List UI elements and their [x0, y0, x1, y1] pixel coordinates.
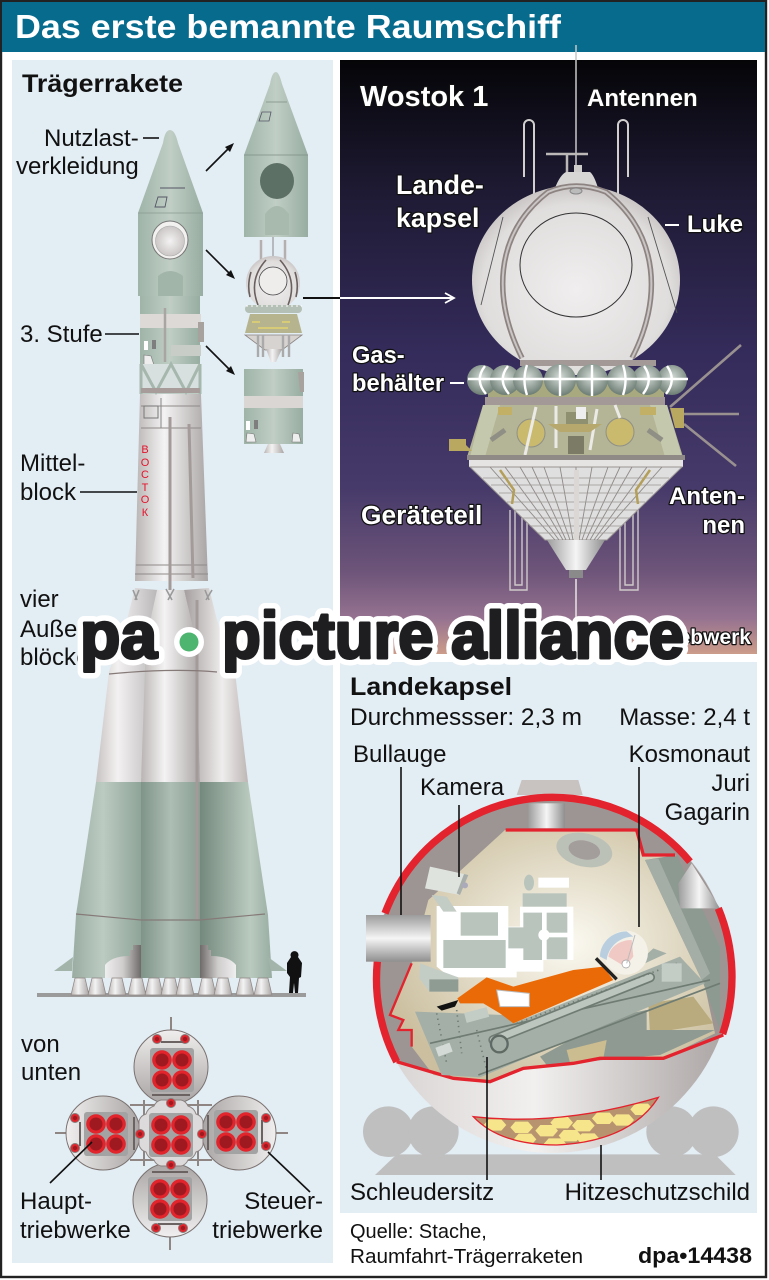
- labels: landing capsule: Kamera: [420, 774, 505, 801]
- labels: Wostok: behälter: [352, 371, 444, 397]
- dome: [555, 172, 598, 188]
- agency code: dpa•14438: [638, 1243, 752, 1268]
- gas bottles: [467, 364, 688, 398]
- straps: [503, 186, 651, 358]
- arrows: [206, 143, 454, 375]
- label: Vostok lettering: Т: [142, 482, 149, 494]
- labels: landing capsule: [350, 741, 750, 1206]
- third stage: [140, 296, 200, 364]
- labels: from below: [20, 1031, 323, 1244]
- heading: Wostok 1: Wostok 1: [360, 81, 488, 113]
- supports: [363, 1106, 739, 1175]
- hatch on ceiling: [553, 828, 616, 872]
- ejection seat: [415, 957, 720, 1077]
- panel: Wostok 1: [340, 60, 757, 654]
- cosmonaut: [437, 931, 667, 1023]
- exploded view: fairing: [244, 72, 308, 237]
- right antennas: [670, 345, 741, 466]
- labels: from below: unten: [21, 1059, 81, 1086]
- title: Das erste bemannte Raumschiff: [15, 9, 562, 46]
- heading: Landekapsel: Landekapsel: [350, 673, 512, 701]
- labels: landing capsule: Juri: [711, 770, 750, 797]
- labels: Wostok: Antennen: [587, 85, 698, 112]
- exploded view: third stage: [244, 369, 304, 453]
- sphere: [472, 185, 680, 375]
- left booster: [96, 588, 158, 782]
- lattice: [141, 364, 200, 394]
- label: Vostok lettering: О: [141, 494, 150, 506]
- rods: [170, 417, 197, 920]
- lower strut: [648, 997, 713, 1033]
- labels: left rocket: block: [20, 479, 77, 506]
- labels: Wostok: Anten-: [669, 483, 745, 510]
- labels: Wostok: Geräteteil: [361, 500, 482, 530]
- side antennas: [510, 510, 638, 590]
- instrument section: [467, 405, 683, 457]
- header band: [2, 2, 765, 52]
- labels: landing capsule: Bullauge: [353, 741, 446, 768]
- diagram: rocket from below: [55, 1017, 288, 1250]
- source note: Quelle: Stache,: [350, 1221, 487, 1243]
- equipment cone: [470, 467, 682, 540]
- labels: left rocket: Mittel-: [20, 450, 85, 477]
- icon: person for scale: [287, 951, 302, 993]
- hatch tube: [528, 803, 565, 828]
- panel: Trägerrakete: [12, 60, 333, 1263]
- labels: Wostok: Gas-: [352, 343, 405, 369]
- label: Vostok lettering: К: [142, 507, 149, 519]
- seat back rail: [645, 855, 720, 1030]
- exploded view: spacecraft: [245, 237, 302, 362]
- labels: left rocket: 3. Stufe: [20, 321, 103, 348]
- labels: Wostok: Luke: [687, 211, 743, 238]
- lower band: [467, 455, 685, 460]
- outer red shell: [376, 797, 732, 1082]
- labels: left rocket: Nutzlast-: [44, 125, 139, 152]
- top neck: [517, 780, 583, 795]
- label: Vostok lettering: С: [141, 469, 149, 481]
- right booster: [184, 588, 248, 782]
- capsule shell: [373, 795, 731, 1153]
- icon: window tube: [366, 915, 431, 962]
- labels: left rocket: blöcke: [20, 644, 89, 671]
- spacecraft Wostok 1: [449, 45, 741, 654]
- labels: Wostok: nen: [702, 512, 745, 539]
- labels: left rocket: verkleidung: [16, 153, 139, 180]
- labels: left rocket: [16, 125, 159, 671]
- labels: Wostok: kapsel: [396, 203, 479, 233]
- labels: from below: Steuer-: [244, 1188, 323, 1215]
- payload fairing: [138, 130, 203, 296]
- core block: [135, 394, 208, 581]
- labels: Wostok: [352, 81, 751, 649]
- labels: landing capsule: Gagarin: [665, 799, 750, 826]
- small box: [419, 963, 458, 992]
- icon: camera: [425, 867, 468, 912]
- labels: landing capsule: Schleudersitz: [350, 1179, 494, 1206]
- top antenna: [575, 45, 577, 188]
- labels: landing capsule: Hitzeschutzschild: [565, 1179, 750, 1206]
- label: Vostok lettering: О: [141, 457, 150, 469]
- heading: Landekapsel: Durchmessser: 2,3 m: [350, 704, 582, 731]
- labels: from below: von: [21, 1031, 60, 1058]
- watermark: pa: [80, 598, 158, 672]
- heading: Landekapsel: Masse: 2,4 t: [619, 704, 750, 731]
- heading: Landekapsel: [350, 673, 750, 731]
- nozzle: [547, 540, 605, 570]
- labels: from below: triebwerke: [212, 1217, 323, 1244]
- cutaway: landing capsule: [363, 780, 739, 1175]
- label: Vostok lettering: [141, 444, 150, 519]
- heat shield: [473, 1097, 658, 1150]
- labels: Wostok: Lande-: [396, 170, 484, 200]
- hatch: [520, 213, 632, 317]
- U antennas: [524, 120, 628, 202]
- labels: from below: triebwerke: [20, 1217, 131, 1244]
- labels: from below: Haupt-: [20, 1188, 92, 1215]
- label: Vostok lettering: В: [141, 444, 149, 456]
- cabin interior: [377, 801, 728, 1080]
- labels: Wostok: Triebwerk: [653, 626, 751, 649]
- rocket base: nozzles and ground: [37, 945, 306, 997]
- source note: [350, 1221, 583, 1268]
- watermark: picture alliance: [222, 598, 684, 672]
- watermark: picture alliance: [222, 598, 684, 672]
- panel: Landekapsel: [340, 662, 757, 1213]
- rocket: assembled launcher: [72, 130, 272, 978]
- watermark: pa: [80, 598, 158, 672]
- source note: Raumfahrt-Trägerraketen: [350, 1246, 583, 1268]
- labels: landing capsule: Kosmonaut: [629, 741, 750, 768]
- instrument panel: [437, 875, 573, 977]
- heading: Trägerrakete: Trägerrakete: [22, 70, 183, 98]
- labels: left rocket: Außen-: [20, 616, 99, 643]
- labels: left rocket: vier: [20, 586, 59, 613]
